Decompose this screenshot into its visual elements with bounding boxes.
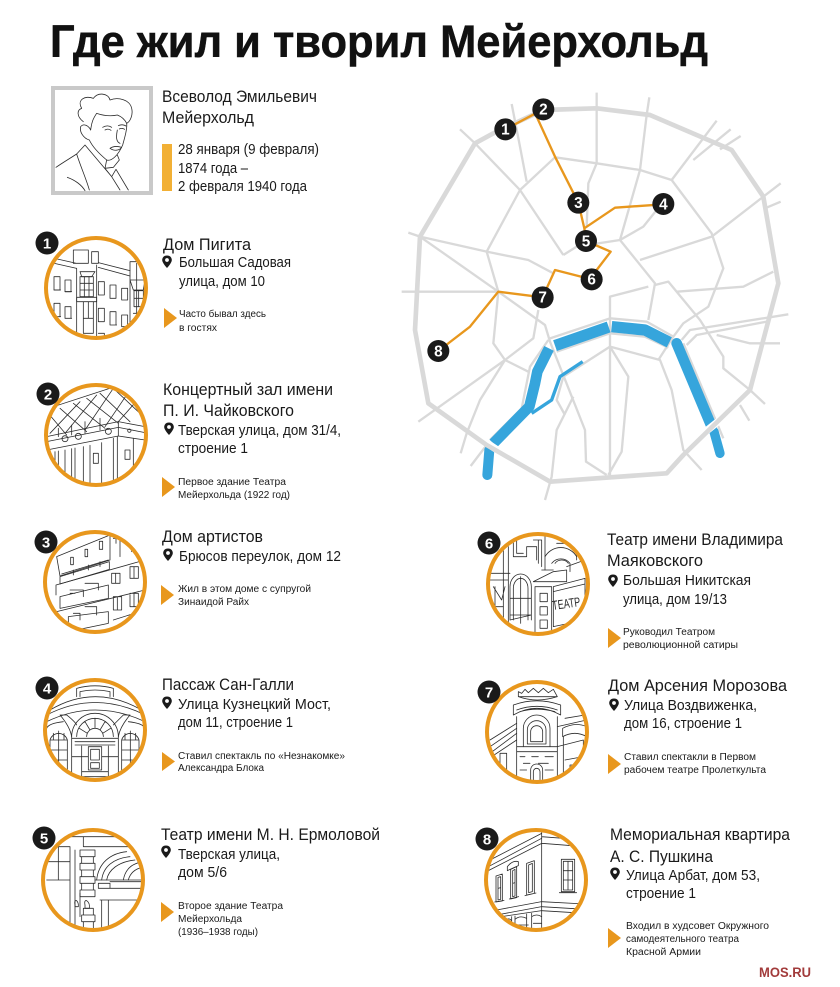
illustration 3 xyxy=(34,530,145,632)
note 1: в гостях xyxy=(179,323,217,334)
arrow 7 xyxy=(608,754,621,774)
address 8: строение 1 xyxy=(626,886,696,902)
name xyxy=(162,88,317,127)
river xyxy=(487,327,720,475)
arrow 5 xyxy=(161,902,174,922)
address 5: дом 5/6 xyxy=(178,865,227,881)
ring 1 xyxy=(46,238,146,338)
address 2: строение 1 xyxy=(178,441,248,457)
note 5: Второе здание Театра xyxy=(178,901,283,912)
map markers: 1 xyxy=(501,122,510,139)
address 6: Большая Никитская xyxy=(623,573,751,589)
map markers: 6 xyxy=(587,272,596,289)
illustration 6 xyxy=(478,532,588,635)
note 2: Мейерхольда (1922 год) xyxy=(178,490,290,501)
panel: place 4 xyxy=(36,676,345,780)
heading 2: П. И. Чайковского xyxy=(163,402,294,420)
note 4: Ставил спектакль по «Незнакомке» xyxy=(178,751,345,762)
route xyxy=(438,109,663,351)
ring 8 xyxy=(486,830,586,930)
address 4 xyxy=(178,697,331,731)
dates xyxy=(178,142,319,195)
address 3: Брюсов переулок, дом 12 xyxy=(179,549,341,565)
badge 6: 6 xyxy=(485,536,493,552)
sign lettering: ТЕАТР xyxy=(551,594,581,613)
note 4: Александра Блока xyxy=(178,763,264,774)
heading 4: Пассаж Сан-Галли xyxy=(162,676,294,694)
badge 7: 7 xyxy=(485,684,493,702)
heading 8 xyxy=(610,826,791,866)
heading 6: Маяковского xyxy=(607,552,703,570)
address 8 xyxy=(626,868,760,902)
note 1: Часто бывал здесь xyxy=(179,308,266,320)
dates: 28 января (9 февраля) xyxy=(178,142,319,158)
illustration 8 xyxy=(476,828,586,933)
icon: pin 6 xyxy=(608,574,618,587)
heading 8: А. С. Пушкина xyxy=(610,848,714,866)
address 1: улица, дом 10 xyxy=(179,274,265,290)
panel: place 6 xyxy=(478,531,784,651)
heading 6: Театр имени Владимира xyxy=(607,531,784,549)
ring 5 xyxy=(43,830,143,930)
address 7: дом 16, строение 1 xyxy=(624,716,742,732)
badge 4: 4 xyxy=(43,680,52,698)
icon: pin 4 xyxy=(162,696,172,709)
ring 2 xyxy=(46,385,146,485)
address 6 xyxy=(623,573,751,608)
panel: place 5 xyxy=(32,826,380,938)
note 7: Ставил спектакли в Первом xyxy=(624,752,756,763)
arrow 2 xyxy=(162,477,175,497)
address 1 xyxy=(179,255,291,290)
address 6: улица, дом 19/13 xyxy=(623,592,727,608)
illustration 7 xyxy=(478,680,587,790)
arrow 1 xyxy=(164,308,177,328)
illustration 2 xyxy=(36,382,146,490)
address 4: Улица Кузнецкий Мост, xyxy=(178,697,331,713)
illustration 4 xyxy=(36,676,145,780)
note 5 xyxy=(178,901,283,938)
address 8: Улица Арбат, дом 53, xyxy=(626,868,760,884)
address 5: Тверская улица, xyxy=(178,847,280,863)
note 8: Красной Армии xyxy=(626,947,701,958)
note 5: Мейерхольда xyxy=(178,914,242,925)
address 7: Улица Воздвиженка, xyxy=(624,698,757,714)
name: Мейерхольд xyxy=(162,109,254,127)
illustration 5 xyxy=(32,826,145,932)
portrait frame xyxy=(53,88,151,193)
source logo: MOS.RU xyxy=(759,965,811,980)
map markers: 8 xyxy=(434,343,443,360)
garden ring road xyxy=(415,108,778,482)
map xyxy=(402,93,788,500)
address 7 xyxy=(624,698,757,732)
note 6: Руководил Театром xyxy=(623,627,715,638)
title: Где жил и творил Мейерхольд xyxy=(50,16,708,67)
icon: pin 3 xyxy=(163,548,173,561)
note 7 xyxy=(624,752,766,776)
note 6 xyxy=(623,627,738,651)
arrow 8 xyxy=(608,928,621,948)
panel: place 2 xyxy=(36,381,341,501)
icon: pin 2 xyxy=(164,422,174,435)
note 5: (1936–1938 годы) xyxy=(178,927,258,938)
date bar xyxy=(162,144,172,191)
note 8: самодеятельного театра xyxy=(626,934,739,945)
icon: pin 8 xyxy=(610,868,620,880)
address 4: дом 11, строение 1 xyxy=(178,715,293,731)
badge 2: 2 xyxy=(44,386,52,404)
arrow 3 xyxy=(161,585,174,605)
heading 3: Дом артистов xyxy=(162,528,263,546)
dates: 1874 года – xyxy=(178,161,249,177)
panel: place 1 xyxy=(36,232,291,343)
badge 8: 8 xyxy=(483,832,491,848)
map markers: 3 xyxy=(574,195,583,212)
heading 5: Театр имени М. Н. Ермоловой xyxy=(161,826,380,844)
map markers: 5 xyxy=(582,233,591,250)
ring 6 xyxy=(488,534,588,634)
note 8: Входил в худсовет Окружного xyxy=(626,921,769,932)
address 2: Тверская улица, дом 31/4, xyxy=(178,423,341,439)
map markers xyxy=(427,98,674,362)
illustration 1 xyxy=(36,232,146,343)
map markers: 7 xyxy=(538,290,547,307)
arrow 6 xyxy=(608,628,621,648)
map markers: 2 xyxy=(539,102,548,119)
note 8 xyxy=(626,921,769,958)
panel: biography xyxy=(53,88,319,195)
badge 3: 3 xyxy=(42,534,50,552)
panel: place 3 xyxy=(34,528,341,632)
heading 2 xyxy=(163,381,333,420)
icon: pin 7 xyxy=(609,698,619,711)
roads xyxy=(402,93,788,500)
map markers: 4 xyxy=(659,196,668,213)
heading 8: Мемориальная квартира xyxy=(610,826,791,844)
icon: pin 5 xyxy=(161,846,171,858)
note 4 xyxy=(178,751,345,774)
ring 3 xyxy=(45,532,145,632)
address 1: Большая Садовая xyxy=(179,255,291,271)
ring 7 xyxy=(487,682,587,782)
note 7: рабочем театре Пролеткульта xyxy=(624,764,766,776)
address 5 xyxy=(178,847,280,881)
badge 5: 5 xyxy=(40,830,48,848)
arrow 4 xyxy=(162,752,175,771)
note 3: Зинаидой Райх xyxy=(178,597,249,608)
icon: pin 1 xyxy=(162,256,172,268)
heading 7: Дом Арсения Морозова xyxy=(608,677,788,695)
note 3 xyxy=(178,584,311,608)
name: Всеволод Эмильевич xyxy=(162,88,317,106)
icon: portrait line drawing xyxy=(56,94,132,191)
dates: 2 февраля 1940 года xyxy=(178,179,308,195)
bridges xyxy=(483,421,719,450)
heading 2: Концертный зал имени xyxy=(163,381,333,399)
heading 6 xyxy=(607,531,784,570)
note 6: революционной сатиры xyxy=(623,640,738,651)
heading 1: Дом Пигита xyxy=(163,236,252,254)
badge 1: 1 xyxy=(43,236,51,252)
panel: place 7 xyxy=(478,677,788,790)
note 2: Первое здание Театра xyxy=(178,477,286,488)
panel: place 8 xyxy=(476,826,791,958)
address 2 xyxy=(178,423,341,457)
note 2 xyxy=(178,477,290,501)
note 3: Жил в этом доме с супругой xyxy=(178,584,311,595)
note 1 xyxy=(179,308,266,334)
ring 4 xyxy=(45,680,145,780)
